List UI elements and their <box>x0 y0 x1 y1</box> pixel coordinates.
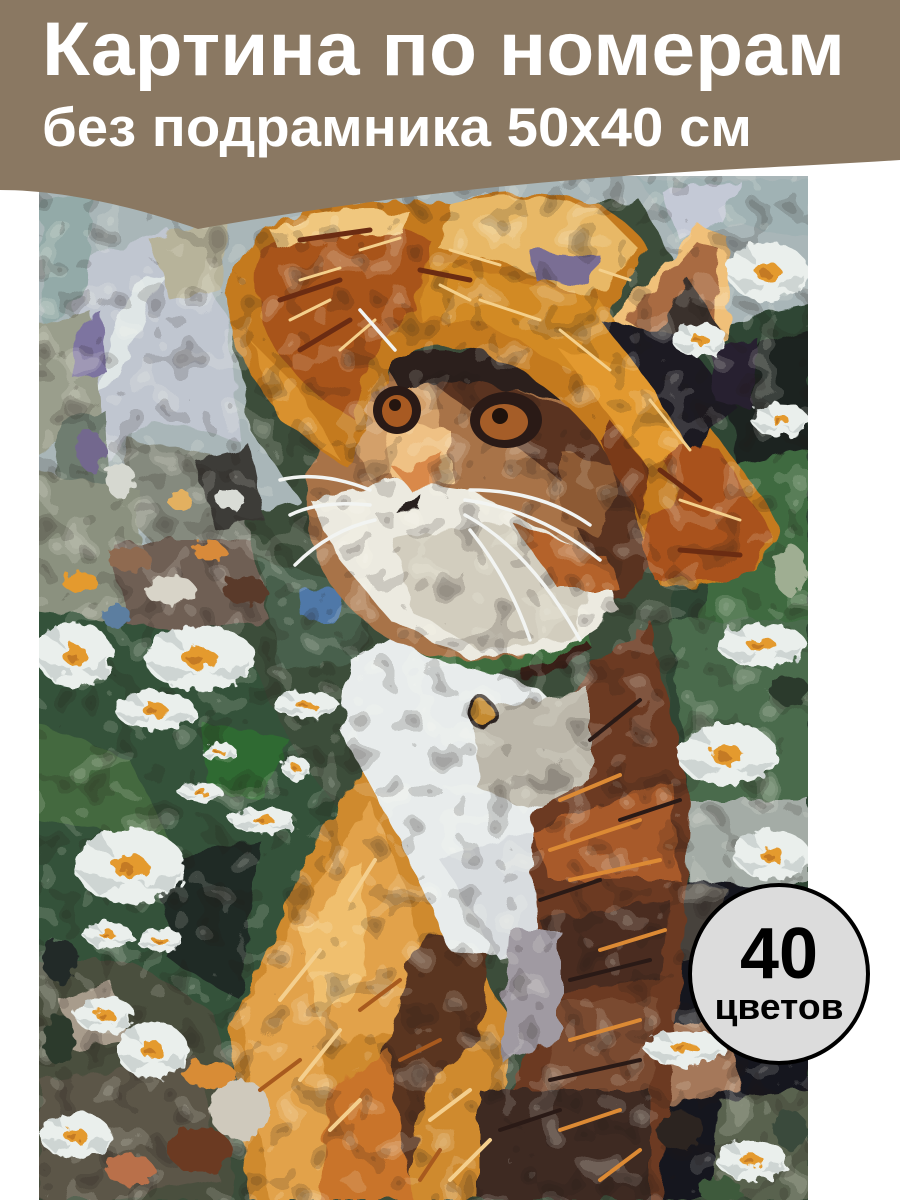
badge: 40 colours <box>690 885 868 1063</box>
title: Картина по номерам <box>42 7 845 92</box>
hat strokes <box>290 238 740 520</box>
paint mottling: dark dabs <box>39 176 808 1200</box>
badge: 40 colours: 40 <box>740 914 818 994</box>
cat eyes <box>373 386 542 448</box>
hat band and flowers <box>600 320 760 450</box>
badge: 40 colours: цветов <box>714 986 844 1027</box>
fur strokes <box>260 700 680 1180</box>
straw hat <box>228 192 781 586</box>
daisies <box>37 242 810 1180</box>
paint mottling: light dabs <box>39 176 808 1200</box>
cat ear <box>613 222 732 342</box>
painting: cat in straw hat among daisies <box>20 170 830 1200</box>
cat body <box>230 620 690 1200</box>
header banner <box>0 0 900 229</box>
subtitle: без подрамника 50х40 см <box>42 96 752 158</box>
cat collar <box>400 630 590 727</box>
scattered small blossoms and dabs <box>42 430 810 1200</box>
cat head <box>305 348 649 662</box>
whiskers <box>280 310 600 640</box>
hat dark strokes <box>280 230 740 555</box>
background: pale sky and foliage <box>20 170 830 1200</box>
